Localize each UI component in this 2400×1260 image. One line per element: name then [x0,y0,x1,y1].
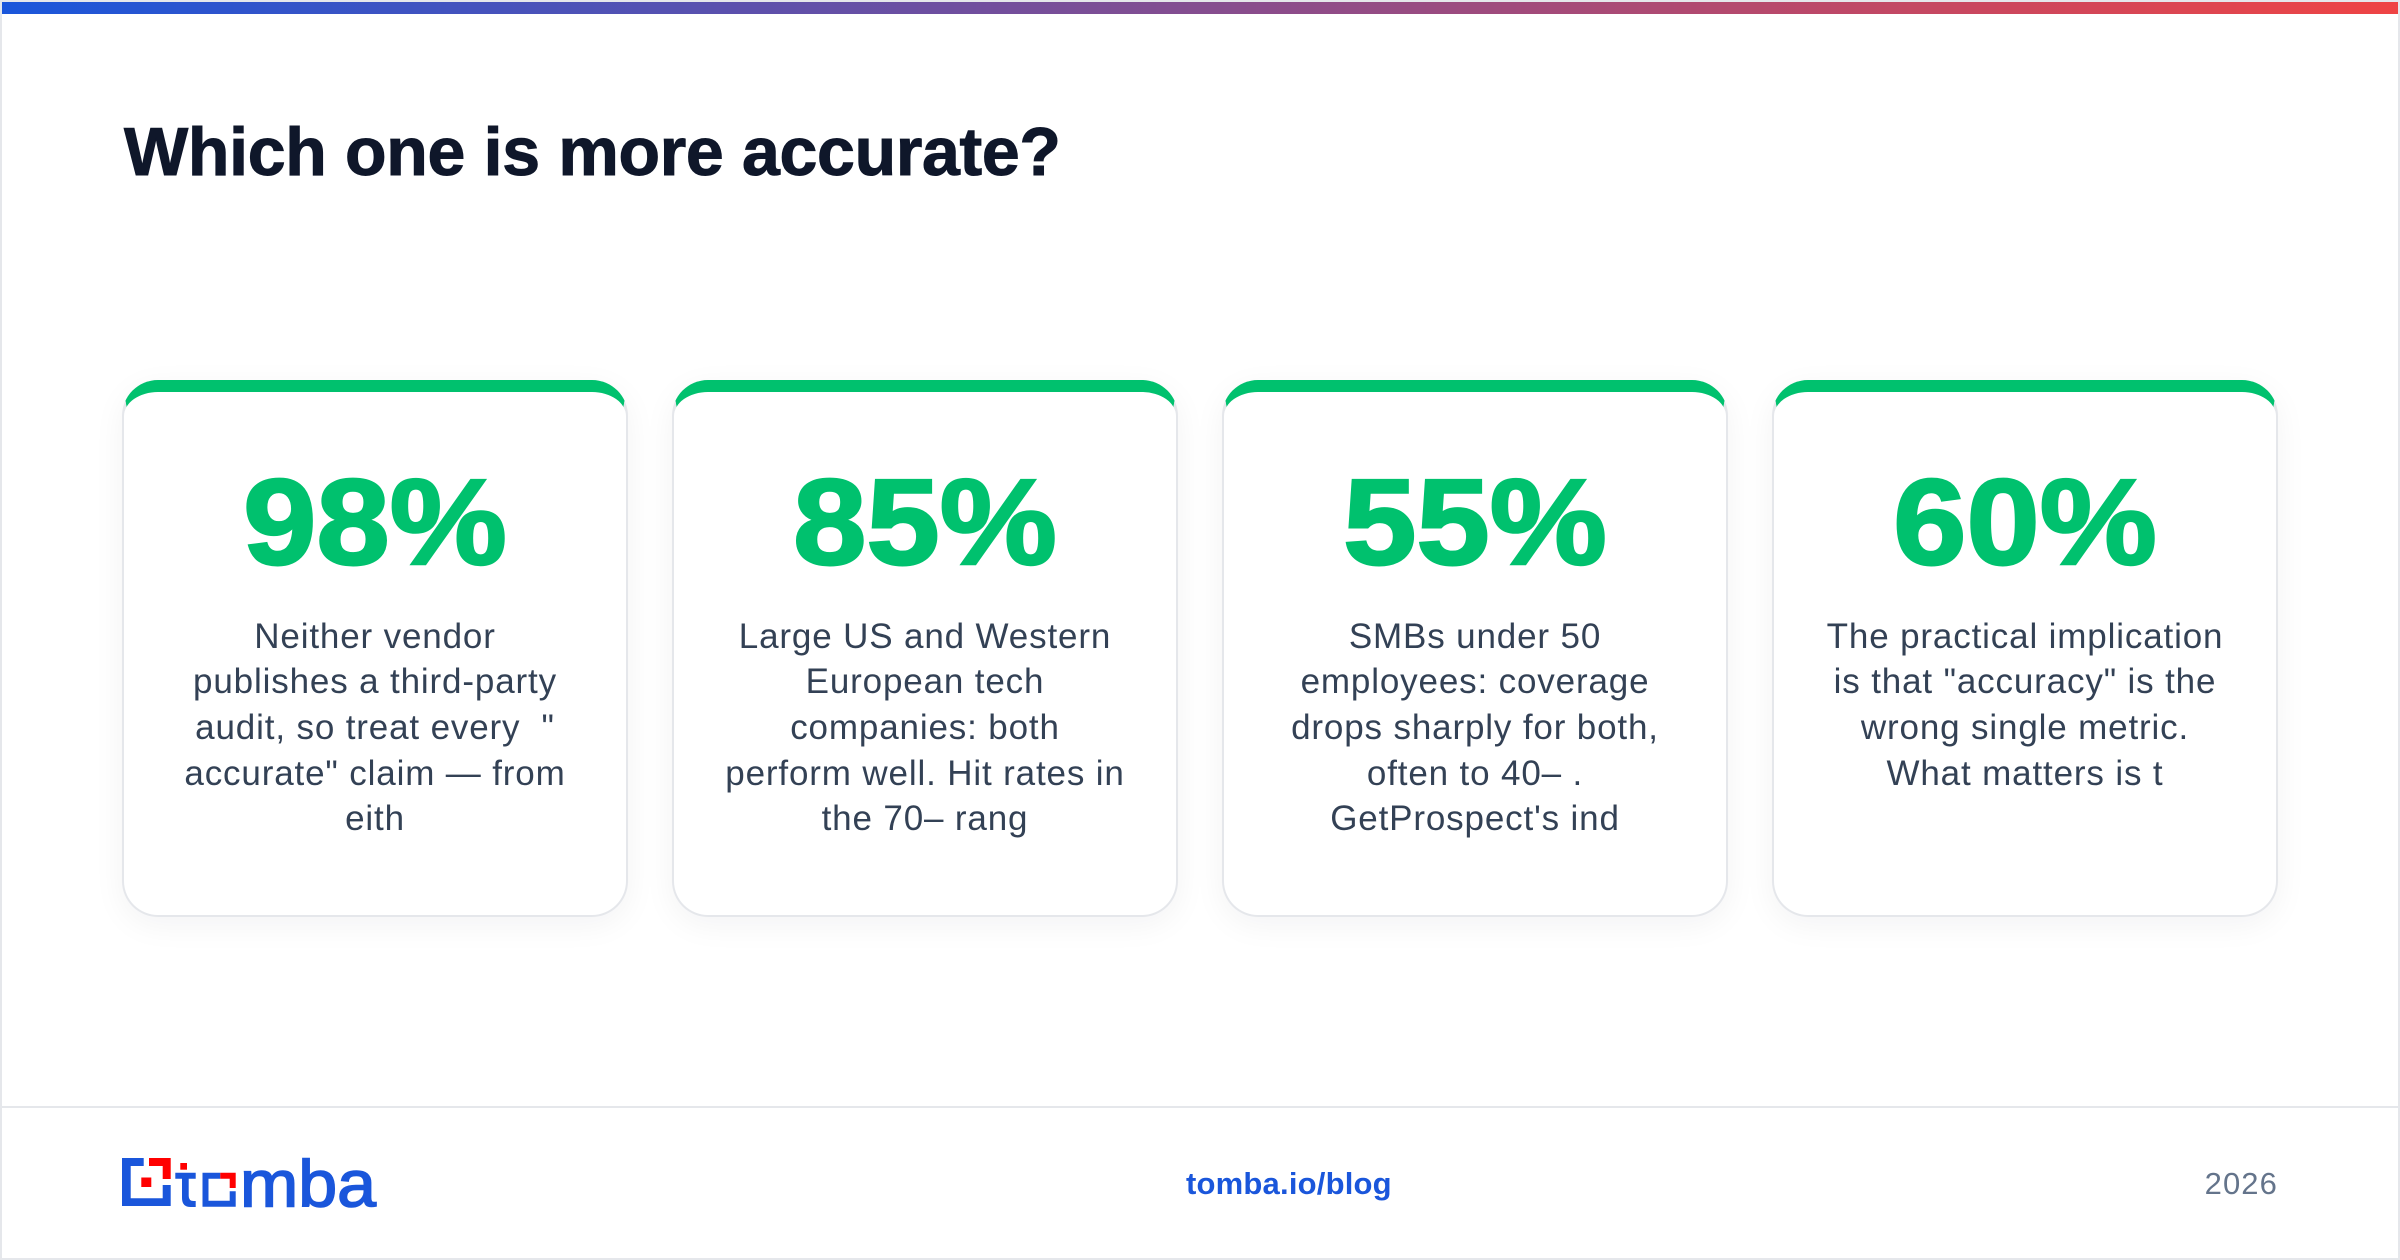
text: card 4 description: The practical implication is that "accuracy" is the wrong single metric. What matters is t [1827,616,2223,793]
logo: tomba [122,1150,377,1216]
icon: logo square mark [122,1158,171,1206]
panel: 55% card [1222,380,1728,917]
title: Which one is more accurate? [124,114,1061,190]
stat: 55%: 55% [1343,454,1607,590]
text: card 1 description: Neither vendor publishes a third-party audit, so treat every " accurate" claim — from eith [184,616,566,838]
footer year: 2026 [2205,1166,2278,1201]
panel: 98% card [122,380,628,917]
text: card 3 description: SMBs under 50 employees: coverage drops sharply for both, often to 40– . GetProspect's ind [1291,616,1659,838]
icon: logo letter t and o mark [175,1163,236,1207]
top gradient bar [2,2,2398,14]
footer link: tomba.io/blog [1186,1166,1392,1201]
stat: 98%: 98% [243,454,507,590]
panel: 85% card [672,380,1178,917]
stat: 60%: 60% [1893,454,2157,590]
text: card 2 description: Large US and Western European tech companies: both perform well. Hit rates in the 70– rang [725,616,1125,838]
stat: 85%: 85% [793,454,1057,590]
panel: 60% card [1772,380,2278,917]
footer divider [2,1106,2398,1108]
